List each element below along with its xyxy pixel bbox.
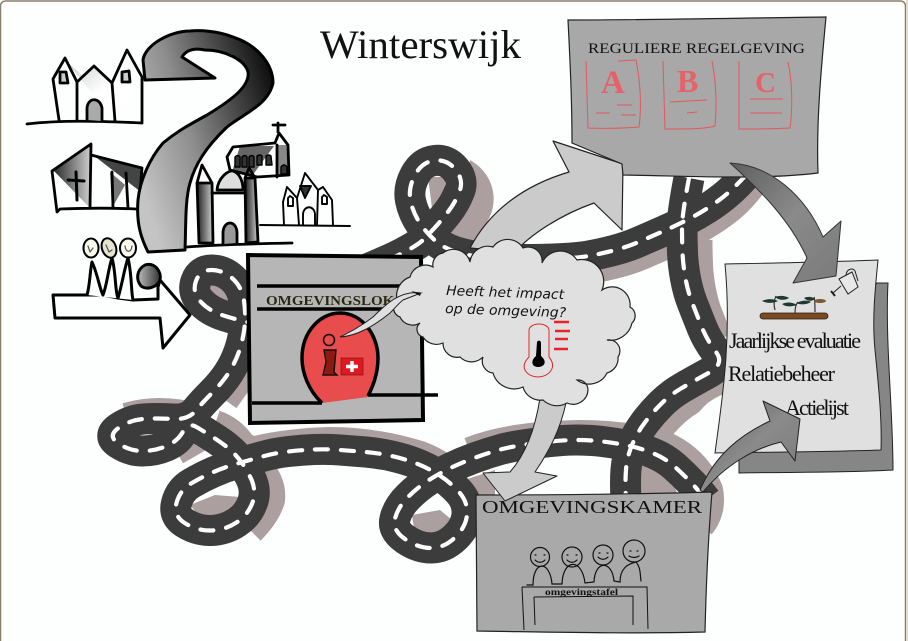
heading: REGULIERE REGELGEVING <box>588 41 805 57</box>
cloud question: Heeft het impact <box>446 283 565 303</box>
arrow: kamer to paper <box>700 401 800 492</box>
panel: omgevingskamer <box>476 492 712 633</box>
people at table <box>527 540 645 585</box>
panel: reguliere regelgeving <box>568 17 826 177</box>
panel: omgevingsloket <box>248 255 438 423</box>
road surface <box>113 160 746 548</box>
heading: OMGEVINGSKAMER <box>482 497 702 517</box>
documents A B C: B <box>677 63 698 99</box>
person <box>323 334 337 375</box>
list items: Jaarlijkse evaluatie <box>729 328 861 353</box>
cloud question <box>445 283 566 321</box>
icon: thermometer <box>524 322 570 377</box>
church group <box>27 50 350 247</box>
church 4 with towers and dome <box>187 165 292 247</box>
documents A B C: C <box>755 67 776 99</box>
icon: watering can <box>831 269 858 296</box>
road centre dashes <box>113 160 746 548</box>
road network <box>113 160 752 548</box>
icon: seedlings <box>760 296 828 319</box>
list items <box>728 328 861 420</box>
table <box>522 587 648 630</box>
church 5 <box>260 173 350 226</box>
church 1 <box>27 50 142 124</box>
thought cloud <box>340 239 635 406</box>
church 3 with tower <box>227 123 289 177</box>
arrow: cloud to reguliere regelgeving <box>470 141 623 252</box>
arrow: cloud to kamer <box>483 398 566 501</box>
church 2 <box>52 144 142 212</box>
question mark <box>138 31 273 252</box>
documents A B C: A <box>601 65 625 101</box>
group of people <box>84 236 160 300</box>
loket heading: OMGEVINGSLOKAAL <box>266 293 426 308</box>
arrow outline <box>53 280 190 348</box>
road shadow <box>125 160 752 535</box>
back sheet <box>739 283 893 473</box>
table label: omgevingstafel <box>545 588 618 598</box>
cloud question: op de omgeving? <box>445 301 566 321</box>
floor line <box>252 395 438 403</box>
documents A B C <box>586 60 792 129</box>
loket rules <box>257 286 400 309</box>
stakeholders arrow <box>53 236 190 348</box>
icon: first aid box <box>341 358 363 375</box>
arrow: regelgeving to paper <box>730 163 841 283</box>
panel: evaluation paper <box>715 260 893 473</box>
front sheet <box>715 260 881 453</box>
speech tail <box>340 293 421 337</box>
red doorway <box>302 313 378 403</box>
list items: Actielijst <box>785 395 849 420</box>
list items: Relatiebeheer <box>728 361 836 386</box>
title: Winterswijk <box>320 22 521 67</box>
